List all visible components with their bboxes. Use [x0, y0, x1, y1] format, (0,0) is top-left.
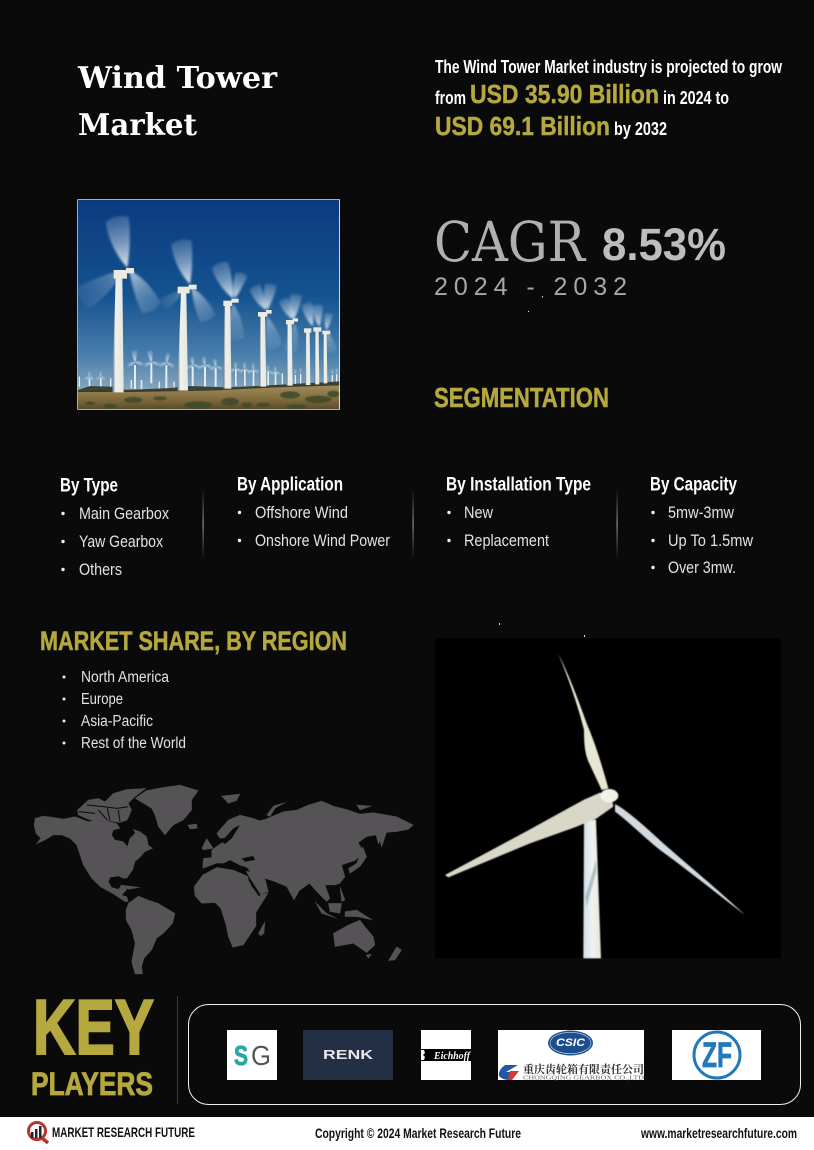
greenland [135, 785, 198, 835]
hudson bay and seas [203, 825, 275, 896]
stray specks [499, 296, 585, 637]
segment column: by type [60, 476, 170, 579]
photo: single wind turbine [435, 638, 781, 958]
title [77, 61, 278, 143]
upper blade [558, 654, 608, 790]
logo: RENK: RENK [323, 1048, 373, 1062]
region list: Rest of the World [81, 735, 186, 752]
nacelles [114, 268, 330, 334]
tower [583, 819, 601, 958]
logo: RENK [303, 1030, 393, 1080]
CAGR period: 2024 - 2032 [434, 273, 627, 301]
segment column: by capacity [650, 474, 753, 577]
region list: Europe [81, 691, 123, 708]
market size statement: in 2024 to [663, 88, 729, 108]
segmentation heading: SEGMENTATION [434, 382, 609, 413]
left blade [445, 793, 613, 877]
africa [194, 867, 268, 947]
key players panel [188, 1004, 800, 1104]
logo: SG: G [251, 1040, 271, 1071]
logo: Eichhoff [421, 1030, 472, 1080]
market share heading: MARKET SHARE, BY REGION [40, 626, 347, 656]
right blade [615, 804, 745, 915]
title: Wind Tower [77, 61, 278, 96]
segment column: by application [237, 474, 390, 550]
segment column: by capacity: Up To 1.5mw [668, 532, 753, 550]
logo: Eichhoff: Eichhoff [433, 1051, 472, 1062]
hub [600, 789, 618, 802]
turbine fans [73, 214, 337, 353]
logo: SG [227, 1030, 277, 1080]
islands [120, 794, 402, 961]
logo: ZF: ZF [702, 1036, 732, 1075]
segment column: by application: By Application [237, 474, 343, 496]
segment column: by capacity: 5mw-3mw [668, 504, 734, 522]
australia [333, 920, 375, 953]
segment column: by installation type: New [464, 504, 493, 522]
big towers [112, 277, 327, 392]
eurasia [203, 801, 413, 902]
footer brand: MARKET RESEARCH FUTURE [52, 1124, 195, 1140]
region list [62, 669, 186, 752]
footer [0, 1117, 814, 1150]
logo: Chongqing Gearbox / CSIC [498, 1030, 644, 1082]
ground [78, 384, 339, 409]
market size statement: from [435, 88, 466, 108]
photo: wind farm [73, 199, 340, 410]
segment column: by type: By Type [60, 476, 118, 496]
copyright: Copyright © 2024 Market Research Future [315, 1125, 521, 1141]
logo: ZF [672, 1030, 761, 1080]
north america [34, 816, 153, 902]
key players heading: KEY [33, 983, 154, 1071]
region list: Asia-Pacific [81, 713, 153, 730]
segment column: by type: Yaw Gearbox [79, 533, 164, 551]
segment column: by capacity: By Capacity [650, 474, 737, 496]
logo: Chongqing Gearbox / CSIC: CHONGQING GEARBOX CO.,LTD [523, 1074, 644, 1082]
footer logo icon [28, 1122, 48, 1143]
south america [126, 896, 175, 974]
segment column: by application: Offshore Wind [255, 504, 348, 522]
CAGR value: 8.53% [602, 219, 726, 270]
region list: North America [81, 669, 169, 686]
market size statement: USD 35.90 Billion [470, 79, 659, 109]
market size statement: by 2032 [614, 119, 667, 139]
key players heading [31, 983, 154, 1102]
segment column: by type: Others [79, 561, 122, 579]
segment column: by installation type [446, 474, 591, 550]
canadian arctic [77, 788, 146, 823]
segment column: by application: Onshore Wind Power [255, 532, 390, 550]
sky [78, 200, 339, 390]
title: Market [78, 108, 197, 143]
logo: Chongqing Gearbox / CSIC: CSIC [556, 1037, 586, 1049]
segment column: by installation type: Replacement [464, 532, 549, 550]
CAGR heading: CAGR [434, 210, 586, 274]
logo: SG: S [234, 1040, 248, 1071]
segment column: by type: Main Gearbox [79, 505, 170, 523]
world map [34, 785, 413, 974]
segment column: by installation type: By Installation Type [446, 474, 591, 496]
market size statement: USD 69.1 Billion [435, 111, 610, 141]
logo: Chongqing Gearbox / CSIC: 重庆齿轮箱有限责任公司 [523, 1061, 644, 1077]
segment column: by capacity: Over 3mw. [668, 559, 736, 577]
market size statement [435, 57, 783, 141]
distant turbines [79, 363, 337, 389]
key players heading: PLAYERS [31, 1066, 153, 1102]
